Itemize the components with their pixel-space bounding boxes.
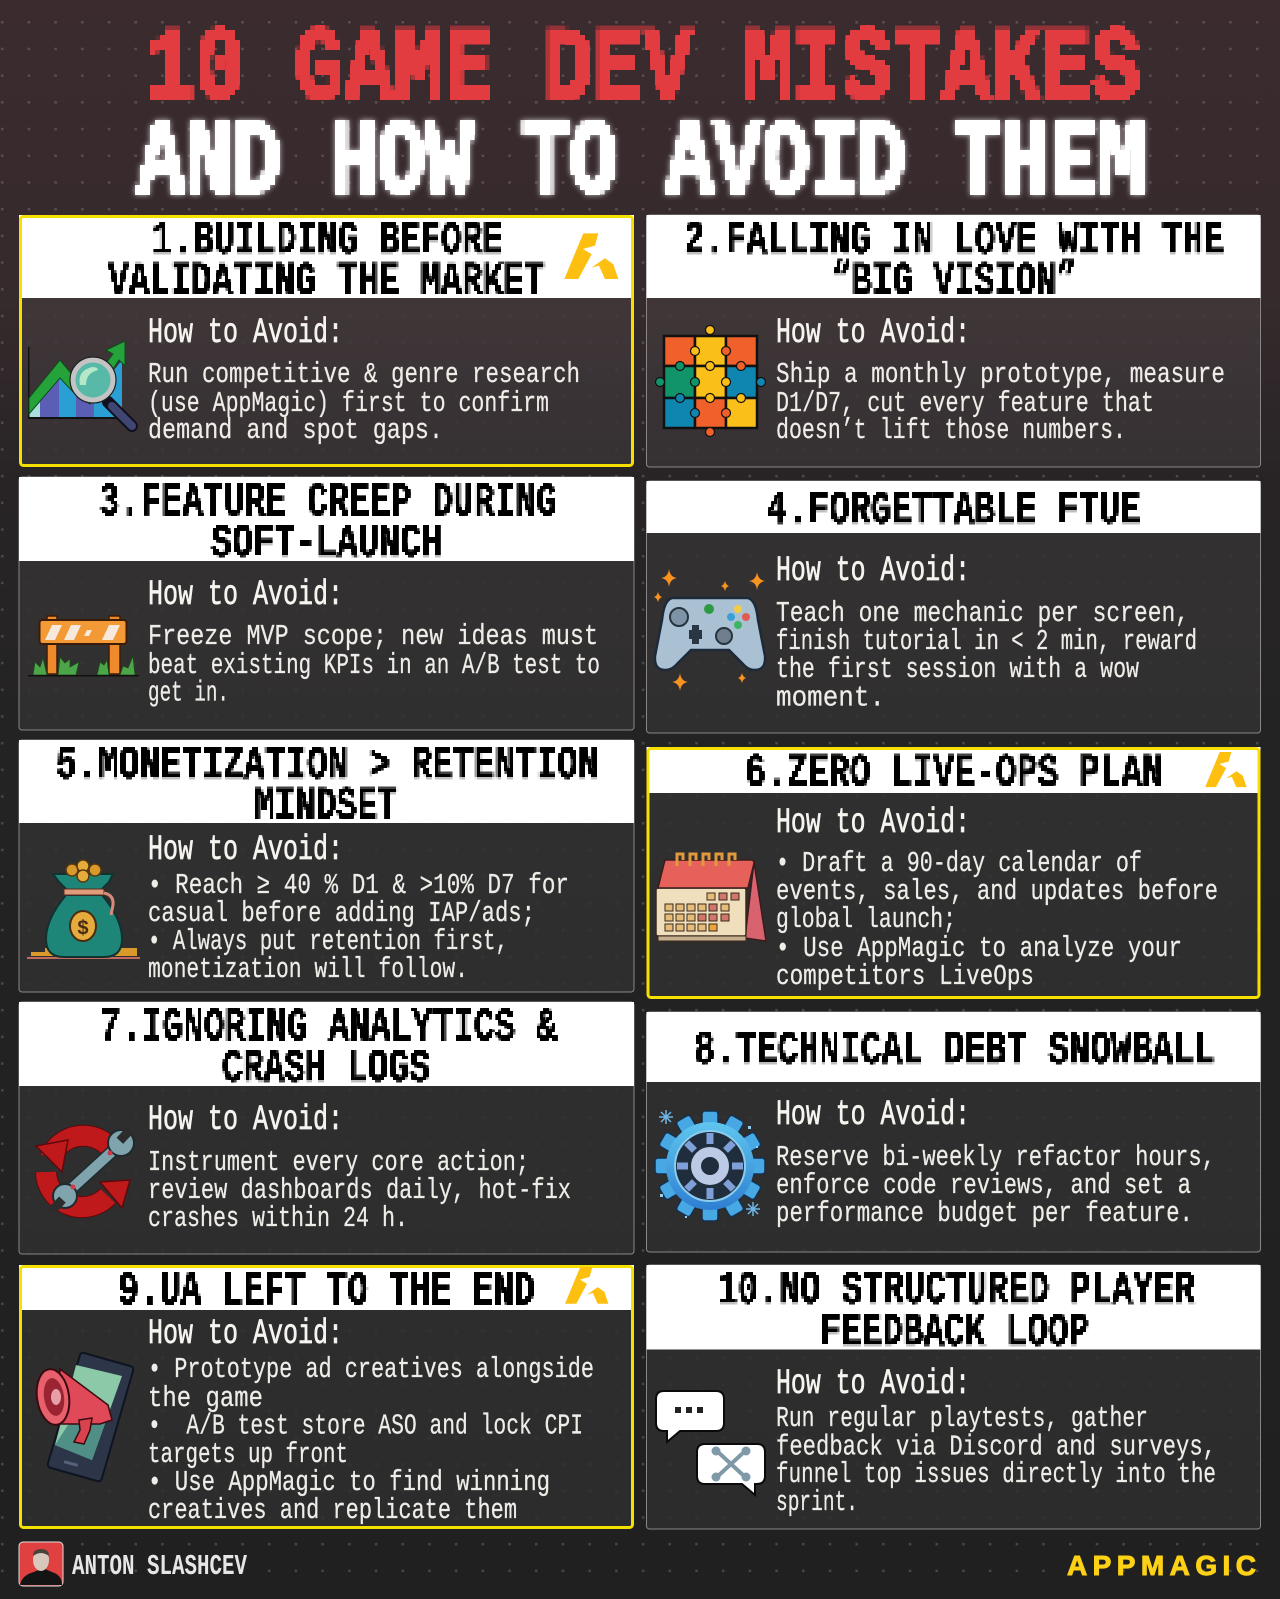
text block 4: moment. (776, 682, 885, 714)
icon: calendar (656, 854, 766, 941)
text block 9: How to Avoid: (148, 1314, 343, 1354)
text block 10: sprint. (776, 1486, 858, 1519)
text block 6: global launch; (776, 903, 956, 936)
text block 9 (148, 1314, 594, 1527)
text block 1 (148, 313, 580, 447)
text block 9: • Prototype ad creatives alongside (148, 1353, 594, 1386)
icon: game controller (654, 569, 765, 691)
author name: ANTON SLASHCEV (72, 1550, 247, 1583)
heading 2 (684, 215, 1224, 309)
heading 1 (108, 215, 545, 309)
text block 7 (148, 1100, 571, 1235)
heading 5: 5.MONETIZATION > RETENTION (56, 740, 599, 793)
text block 4: the first session with a wow (776, 653, 1139, 686)
heading 5 (56, 740, 599, 834)
text block 5 (148, 830, 569, 986)
panel: mistake 9 (19, 1265, 634, 1529)
icon: appmagic logo (565, 1267, 608, 1304)
icon: gear (655, 1110, 765, 1221)
text block 1: demand and spot gaps. (148, 414, 443, 447)
text block 6: • Draft a 90-day calendar of (776, 847, 1142, 880)
text block 3: How to Avoid: (148, 575, 343, 615)
text block 9: • A/B test store ASO and lock CPI (148, 1410, 583, 1442)
heading 7: CRASH LOGS (222, 1043, 430, 1096)
text block 2: doesn’t lift those numbers. (776, 414, 1126, 447)
text block 7: Instrument every core action; (148, 1146, 529, 1179)
panel: mistake 2 (646, 215, 1260, 467)
text block 1: (use AppMagic) first to confirm (148, 387, 549, 420)
icon: red cycle with wrench (36, 1127, 134, 1213)
text block 9: the game (148, 1382, 263, 1415)
panel: mistake 6 (646, 747, 1260, 999)
panel: mistake 8 (646, 1012, 1260, 1252)
text block 8: How to Avoid: (776, 1095, 970, 1135)
text block 10: Run regular playtests, gather (776, 1402, 1148, 1435)
text block 7: How to Avoid: (148, 1100, 343, 1140)
footer: appmagic wordmark: APPMAGIC (1067, 1550, 1256, 1581)
text block 9: creatives and replicate them (148, 1494, 517, 1527)
heading 10: FEEDBACK LOOP (820, 1307, 1089, 1360)
icon: road barrier (28, 616, 139, 676)
text block 4 (776, 551, 1197, 714)
text block 1: Run competitive & genre research (148, 358, 580, 391)
heading 7 (100, 1002, 558, 1096)
panel: mistake 10 (646, 1265, 1260, 1529)
text block 6: competitors LiveOps (776, 960, 1034, 993)
heading 1: 1.BUILDING BEFORE (152, 215, 503, 268)
heading 1: VALIDATING THE MARKET (108, 256, 545, 309)
heading 2: “BIG VISION” (831, 256, 1077, 309)
text block 6 (776, 803, 1218, 993)
heading 5: MINDSET (254, 781, 398, 834)
icon: chat bubbles (656, 1391, 765, 1495)
heading 3: SOFT-LAUNCH (211, 518, 442, 571)
icon: appmagic logo (1205, 752, 1247, 787)
heading 7: 7.IGNORING ANALYTICS & (100, 1002, 558, 1055)
text block 2 (776, 313, 1225, 447)
text block 7: review dashboards daily, hot-fix (148, 1174, 571, 1207)
text block 5: • Always put retention first, (148, 925, 508, 958)
icon: appmagic logo (564, 233, 618, 279)
heading 9: 9.UA LEFT TO THE END (118, 1266, 535, 1319)
heading 3: 3.FEATURE CREEP DURING (99, 477, 557, 530)
panel: mistake 3 (19, 477, 634, 730)
text block 5: • Reach ≥ 40 % D1 & >10% D7 for (148, 869, 569, 902)
text block 6: How to Avoid: (776, 803, 970, 843)
heading 3 (99, 477, 557, 571)
text block 3: Freeze MVP scope; new ideas must (148, 620, 598, 653)
panel: mistake 4 (646, 481, 1260, 733)
heading 4: 4.FORGETTABLE FTUE (766, 485, 1140, 538)
title (137, 11, 1146, 224)
text block 7: crashes within 24 h. (148, 1202, 408, 1235)
icon: money bag: $ (77, 918, 89, 941)
text block 3 (148, 575, 600, 710)
text block 4: How to Avoid: (776, 551, 970, 591)
icon: author avatar (19, 1542, 63, 1586)
text block 9: • Use AppMagic to find winning (148, 1466, 550, 1499)
icon: chart with magnifier (28, 341, 132, 426)
text block 5: casual before adding IAP/ads; (148, 897, 535, 930)
text block 10 (776, 1364, 1216, 1519)
panel: mistake 1 (19, 215, 634, 467)
panel: mistake 5 (19, 740, 634, 992)
text block 3: beat existing KPIs in an A/B test to (148, 649, 600, 682)
text block 2: D1/D7, cut every feature that (776, 387, 1154, 420)
text block 8 (776, 1095, 1215, 1230)
text block 3: get in. (148, 676, 229, 710)
text block 9: targets up front (148, 1438, 348, 1471)
text block 10: How to Avoid: (776, 1364, 970, 1404)
text block 5: How to Avoid: (148, 830, 343, 870)
text block 1: How to Avoid: (148, 313, 343, 353)
footer: author (19, 1542, 247, 1586)
heading 10 (717, 1265, 1196, 1360)
text block 5: monetization will follow. (148, 953, 468, 986)
icon: puzzle (656, 326, 766, 436)
icon: money bag (27, 860, 140, 959)
text block 2: How to Avoid: (776, 313, 970, 353)
panel: mistake 7 (19, 1002, 634, 1254)
icon: phone with megaphone (33, 1353, 133, 1481)
